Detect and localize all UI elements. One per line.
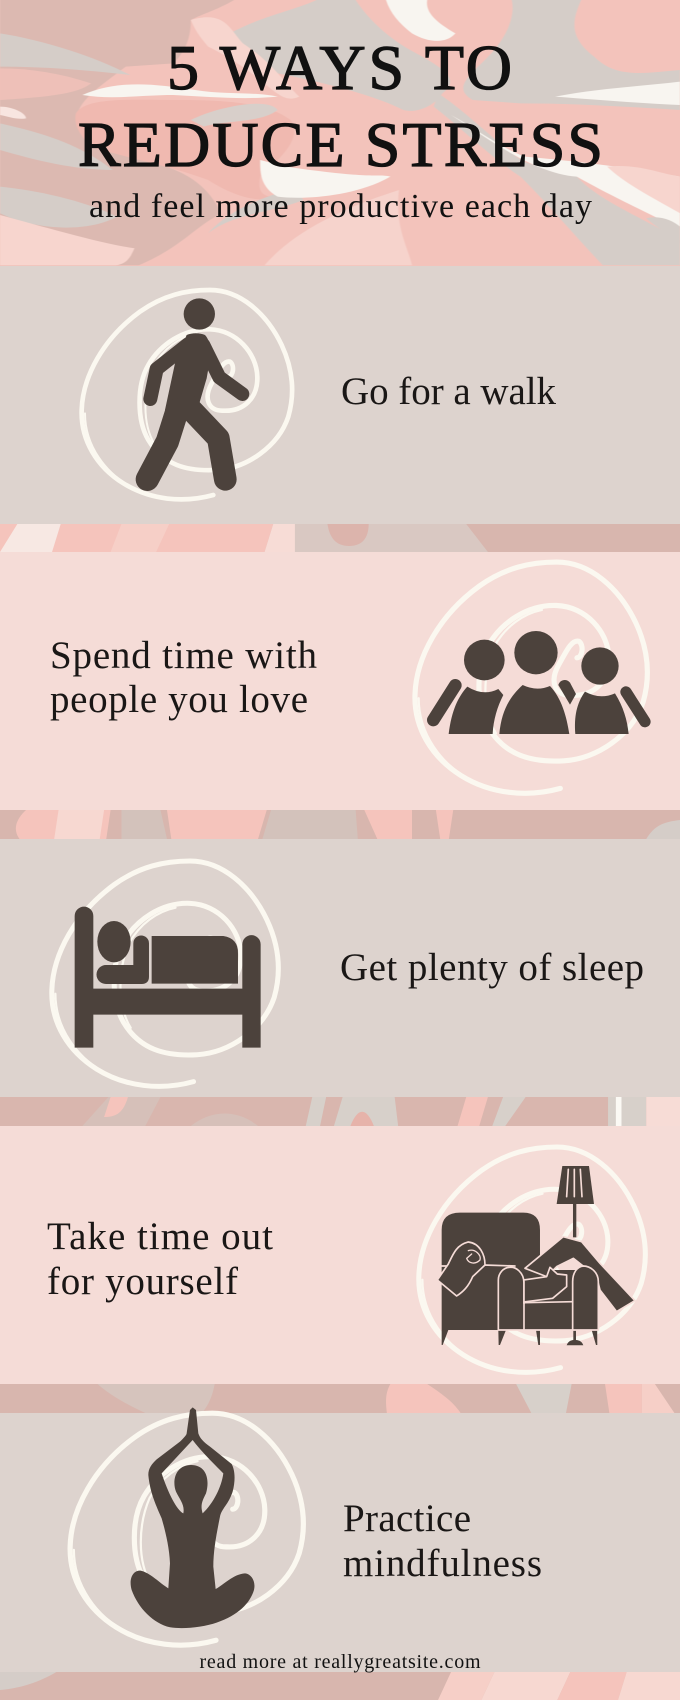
swirl 1 [82, 290, 292, 499]
icon: person in bed [75, 907, 261, 1048]
label: practice mindfulness: mindfulness [343, 1542, 542, 1585]
label: practice mindfulness [343, 1497, 542, 1585]
marble background: header [0, 0, 680, 266]
title: 5 WAYS TO [167, 32, 512, 103]
label: take time out for yourself: Take time out [47, 1215, 273, 1258]
label: spend time with people you love: Spend time with [50, 634, 317, 677]
marble strip 4 [0, 1384, 680, 1413]
title [78, 32, 603, 180]
marble strip: bottom [0, 1672, 680, 1700]
title: REDUCE STRESS [78, 109, 603, 180]
panel 3: get plenty of sleep [0, 839, 680, 1097]
label: take time out for yourself [47, 1215, 273, 1303]
label: spend time with people you love: people you love [50, 678, 308, 721]
panel 1: go for a walk [0, 266, 680, 524]
subtitle: and feel more productive each day [89, 188, 592, 225]
panel 5: practice mindfulness [0, 1407, 680, 1672]
marble strip 3 [0, 1097, 680, 1126]
swirl 5 [70, 1413, 303, 1645]
icon: person relaxing in armchair with lamp [437, 1166, 635, 1345]
panel 2: spend time with people you love [0, 552, 680, 810]
label: spend time with people you love [50, 634, 317, 721]
label: take time out for yourself: for yourself [47, 1260, 238, 1303]
label: get plenty of sleep: Get plenty of sleep [340, 946, 644, 989]
icon: group of people [433, 631, 645, 734]
panel 4: take time out for yourself [0, 1126, 680, 1384]
label: go for a walk: Go for a walk [341, 370, 556, 413]
marble strip 2 [0, 810, 680, 839]
label: practice mindfulness: Practice [343, 1497, 471, 1540]
icon: meditating figure [131, 1407, 254, 1628]
swirl 2 [415, 562, 647, 793]
swirl 4 [419, 1147, 645, 1372]
footer link text: read more at reallygreatsite.com [200, 1651, 481, 1673]
icon: walking person [147, 298, 242, 479]
swirl 3 [52, 861, 278, 1086]
marble strip 1 [0, 524, 680, 552]
